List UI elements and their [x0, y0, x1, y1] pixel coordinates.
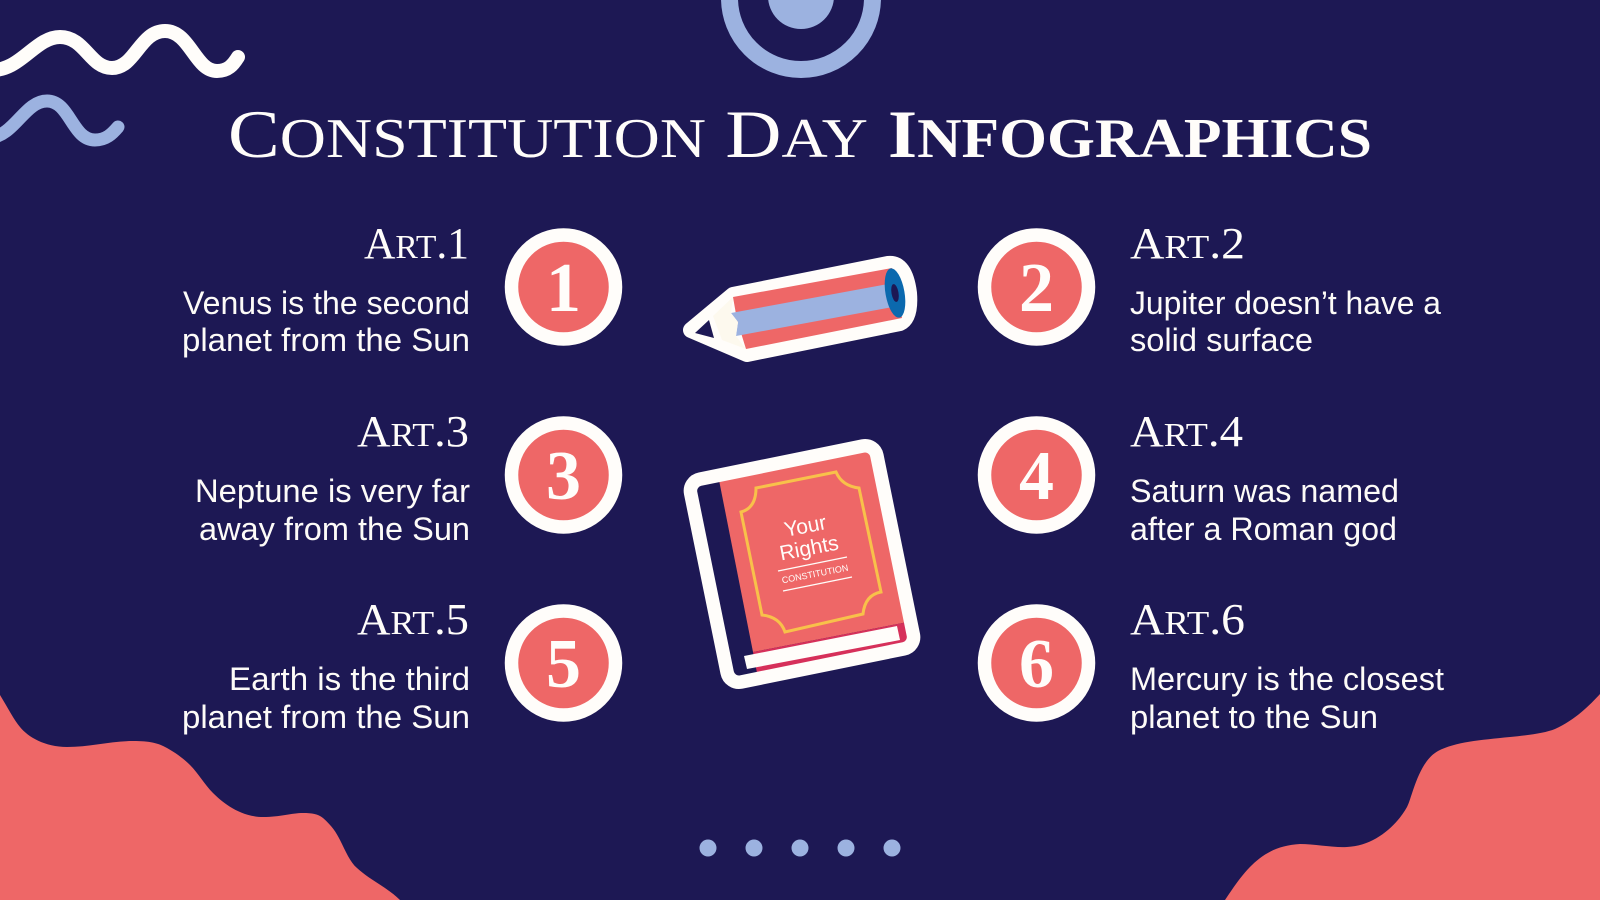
item 5: left text: [182, 592, 470, 735]
title: Constitution Day: [228, 87, 868, 175]
item 1: number badge: 1: [546, 250, 581, 327]
item 3: left text: [195, 404, 470, 547]
decoration: blue squiggle: [0, 101, 118, 140]
decoration: top target circle: [730, 0, 872, 70]
item 5: left text: Earth is the third: [229, 661, 470, 697]
item 5: number badge: [512, 611, 616, 715]
item 2: right text: Art.2: [1130, 216, 1245, 269]
item 1: number badge: [512, 235, 616, 339]
item 5: left text: planet from the Sun: [182, 699, 470, 735]
item 2: number badge: [984, 235, 1088, 339]
item 6: right text: [1130, 592, 1444, 735]
title: Infographics: [888, 87, 1372, 175]
item 1: left text: Venus is the second: [183, 285, 470, 321]
item 1: left text: planet from the Sun: [182, 322, 470, 358]
pagination dots: [700, 840, 900, 856]
item 1: left text: [182, 216, 470, 358]
item 4: number badge: [984, 423, 1088, 527]
item 5: number badge: 5: [546, 626, 581, 703]
item 6: number badge: [984, 611, 1088, 715]
icon: constitution book: CONSTITUTION: [781, 563, 849, 585]
item 4: right text: Saturn was named: [1130, 473, 1399, 509]
item 6: right text: Mercury is the closest: [1130, 661, 1444, 697]
item 3: number badge: [512, 423, 616, 527]
item 2: number badge: 2: [1019, 250, 1054, 327]
title: [228, 87, 1372, 175]
wave blob: bottom right: [1225, 694, 1600, 900]
item 3: left text: away from the Sun: [199, 511, 470, 547]
item 4: right text: Art.4: [1130, 404, 1243, 457]
item 4: number badge: 4: [1019, 438, 1054, 515]
item 2: right text: solid surface: [1130, 322, 1313, 358]
item 6: right text: Art.6: [1130, 592, 1245, 645]
item 1: left text: Art.1: [364, 216, 469, 269]
item 4: right text: [1130, 404, 1399, 547]
icon: constitution book: [688, 444, 916, 684]
item 3: number badge: 3: [546, 438, 581, 515]
decoration: white squiggle: [0, 31, 238, 71]
icon: pencil: [691, 264, 909, 354]
item 5: left text: Art.5: [357, 592, 469, 645]
icon: constitution book: Rights: [778, 532, 841, 565]
item 6: number badge: 6: [1019, 626, 1054, 703]
wave blob: bottom left: [0, 695, 400, 900]
item 3: left text: Art.3: [357, 404, 469, 457]
icon: constitution book: Your: [782, 511, 828, 542]
item 4: right text: after a Roman god: [1130, 511, 1397, 547]
item 3: left text: Neptune is very far: [195, 473, 470, 509]
item 6: right text: planet to the Sun: [1130, 699, 1378, 735]
item 2: right text: Jupiter doesn’t have a: [1130, 285, 1442, 321]
item 2: right text: [1130, 216, 1442, 358]
